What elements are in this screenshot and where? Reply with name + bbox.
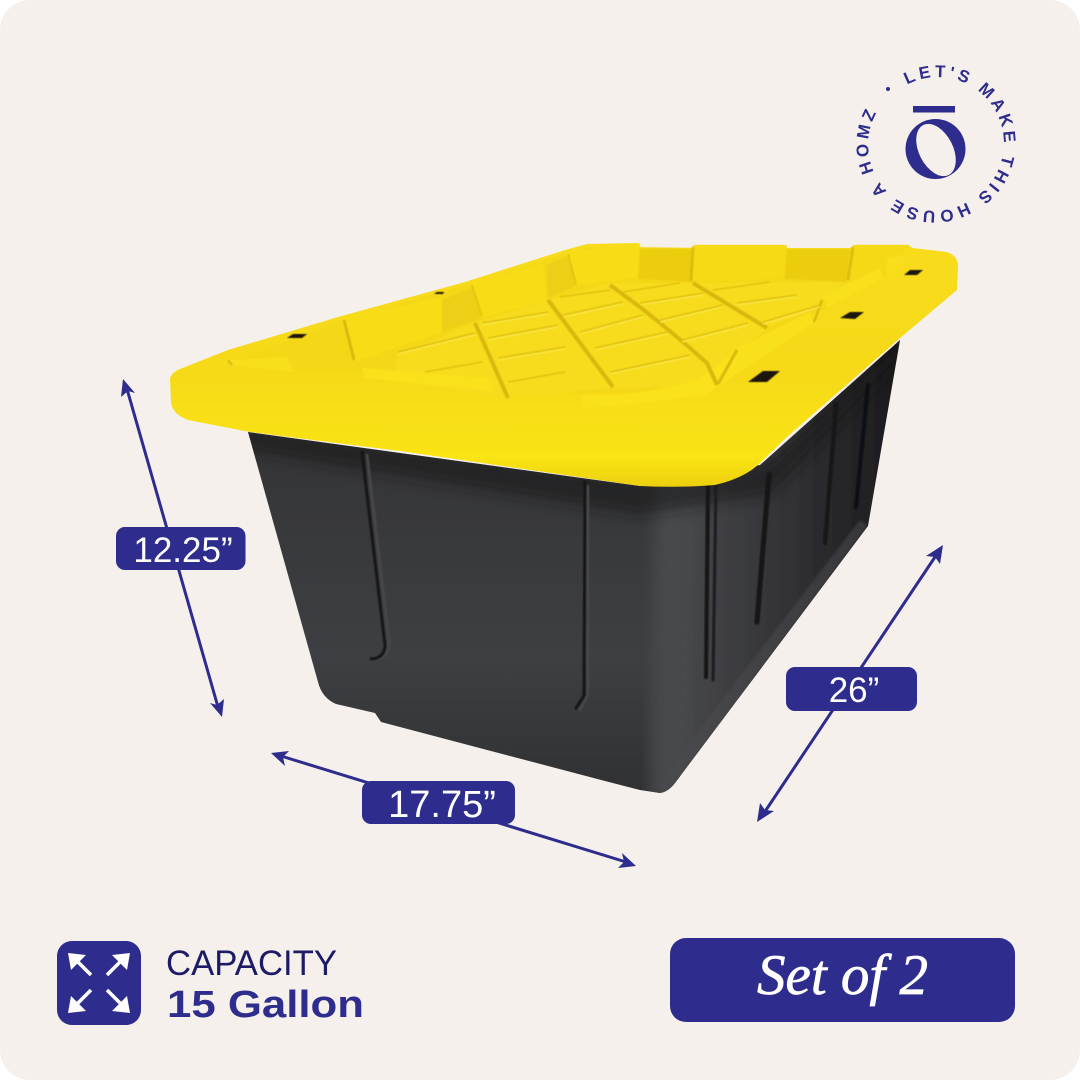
badge circular text: LET'S MAKE THIS HOUSE A HOMZ — [856, 65, 1016, 223]
lid rib lines — [398, 282, 820, 382]
label: width 17.75: 17.75” — [388, 784, 496, 826]
capacity text — [166, 944, 364, 1026]
arrow: height — [121, 379, 224, 717]
tote body — [240, 330, 910, 800]
lid slots — [287, 270, 923, 382]
label: depth 26 — [786, 667, 917, 711]
lid rib highlights — [398, 295, 820, 374]
badge: set of 2 — [670, 938, 1015, 1022]
lid raised blocks — [227, 243, 910, 408]
badge: set of 2: Set of 2 — [757, 944, 928, 1007]
brand badge — [856, 65, 1016, 223]
label: height 12.25: 12.25” — [133, 531, 233, 570]
product photo: storage tote — [170, 243, 958, 800]
lid grooves — [475, 283, 767, 398]
capacity text: 15 Gallon — [167, 984, 364, 1026]
lid floor panels — [395, 282, 843, 398]
label: height 12.25 — [116, 527, 246, 570]
capacity icon — [57, 941, 141, 1025]
lid recess — [232, 247, 905, 394]
arrow: width — [271, 751, 636, 868]
label: width 17.75 — [362, 781, 515, 826]
arrow: depth — [757, 545, 943, 822]
badge logo — [906, 106, 966, 183]
label: depth 26: 26” — [829, 671, 879, 710]
capacity text: CAPACITY — [166, 944, 337, 983]
lid block edge shadows — [228, 247, 853, 384]
tote lid — [170, 243, 958, 487]
